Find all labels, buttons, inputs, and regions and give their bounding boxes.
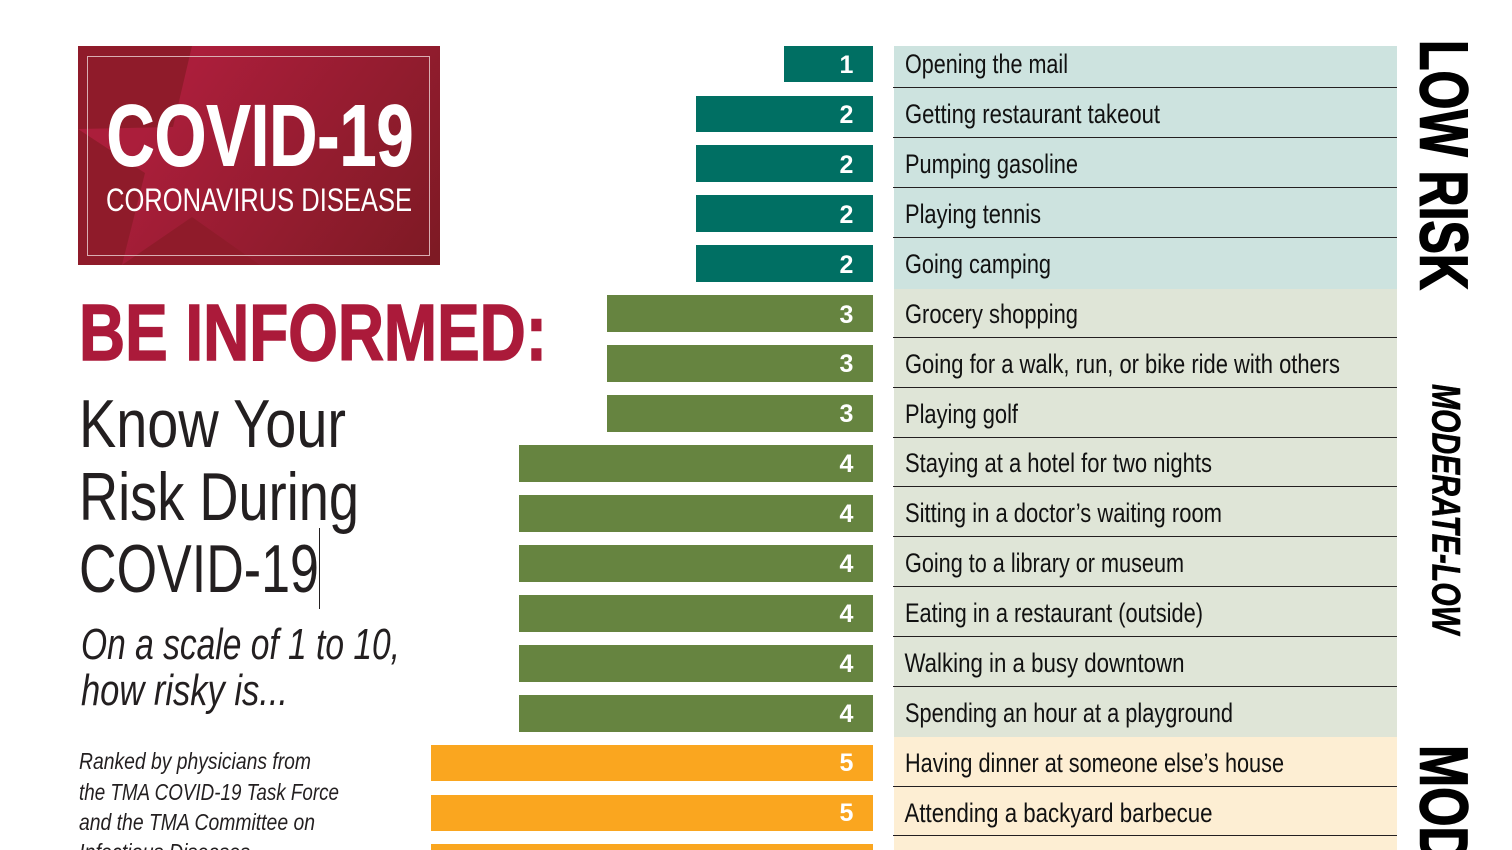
bar: dinner at a house xyxy=(431,745,873,781)
bar: playing tennis xyxy=(696,195,873,232)
subheading: scale question: how risky is... xyxy=(81,666,288,715)
activity labels: Staying at a hotel for two nights xyxy=(905,448,1212,478)
bar chart: risk scores xyxy=(431,46,873,850)
bar: opening the mail: 1 xyxy=(840,51,854,79)
activity labels: Going to a library or museum xyxy=(905,548,1184,578)
activity labels: Getting restaurant takeout xyxy=(905,99,1160,129)
activity labels: Playing golf xyxy=(905,399,1018,429)
bar: pumping gasoline: 2 xyxy=(840,151,853,179)
bar: opening the mail xyxy=(784,46,873,82)
badge subtitle: CORONAVIRUS DISEASE xyxy=(106,182,412,218)
subheading: scale question: On a scale of 1 to 10, xyxy=(81,620,400,669)
bar: walk with others xyxy=(607,345,873,382)
bar: playing golf: 3 xyxy=(840,400,853,428)
bar: waiting room: 4 xyxy=(840,500,854,528)
heading: know your risk: COVID-19 xyxy=(79,531,319,607)
bar: grocery shopping: 3 xyxy=(840,301,853,329)
bar: hotel: 4 xyxy=(840,450,854,478)
bar: dinner at a house: 5 xyxy=(840,749,854,777)
activity labels: Spending an hour at a playground xyxy=(905,698,1233,728)
subheading: scale question xyxy=(81,620,400,715)
activity labels: Going camping xyxy=(905,249,1051,279)
heading: be informed: BE INFORMED: xyxy=(79,288,547,377)
bar: busy downtown: 4 xyxy=(840,650,854,678)
heading: know your risk: Risk During xyxy=(79,459,359,535)
side label: moderate-low: MODERATE-LOW xyxy=(1424,384,1468,636)
bar: going camping xyxy=(696,245,873,282)
bar: pumping gasoline xyxy=(696,145,873,182)
bar: restaurant takeout xyxy=(696,96,873,132)
activity labels: Sitting in a doctor’s waiting room xyxy=(905,498,1222,528)
activity labels: Having dinner at someone else’s house xyxy=(905,748,1284,778)
side label: low risk: LOW RISK xyxy=(1406,40,1482,290)
bar: grocery shopping xyxy=(607,295,873,332)
source note: Ranked by physicians from xyxy=(79,748,311,774)
source note: the TMA COVID-19 Task Force xyxy=(79,779,339,805)
badge: COVID-19 coronavirus disease xyxy=(78,46,440,265)
bar: library or museum: 4 xyxy=(840,550,854,578)
bar: restaurant outside xyxy=(519,595,873,632)
bar: waiting room xyxy=(519,495,873,532)
heading: know your risk xyxy=(79,386,359,609)
bar: library or museum xyxy=(519,545,873,582)
badge title: COVID-19 xyxy=(106,88,414,184)
source note: and the TMA Committee on xyxy=(79,809,315,835)
activity labels: Attending a backyard barbecue xyxy=(904,798,1212,828)
activity labels xyxy=(904,49,1340,828)
source note xyxy=(79,748,339,850)
bar: playground xyxy=(519,695,873,732)
bar: going camping: 2 xyxy=(840,251,853,279)
panel: row backgrounds xyxy=(894,46,1397,850)
bar: restaurant outside: 4 xyxy=(840,600,854,628)
bar: backyard barbecue xyxy=(431,795,873,831)
activity labels: Opening the mail xyxy=(905,49,1068,79)
bar: hotel xyxy=(519,445,873,482)
activity labels: Playing tennis xyxy=(905,199,1041,229)
bar: cut-off row xyxy=(431,844,873,850)
bar: busy downtown xyxy=(519,645,873,682)
bar: backyard barbecue: 5 xyxy=(840,799,854,827)
bar: playing tennis: 2 xyxy=(840,201,853,229)
activity labels: Pumping gasoline xyxy=(905,149,1078,179)
bar: playground: 4 xyxy=(840,700,854,728)
bar: playing golf xyxy=(607,395,873,432)
activity labels: Going for a walk, run, or bike ride with others xyxy=(905,349,1340,379)
row dividers xyxy=(893,87,1397,836)
bar: walk with others: 3 xyxy=(840,350,853,378)
activity labels: Eating in a restaurant (outside) xyxy=(905,598,1203,628)
heading: know your risk: Know Your xyxy=(79,386,346,462)
bar: restaurant takeout: 2 xyxy=(840,101,853,129)
activity labels: Grocery shopping xyxy=(905,299,1078,329)
activity labels: Walking in a busy downtown xyxy=(904,648,1184,678)
